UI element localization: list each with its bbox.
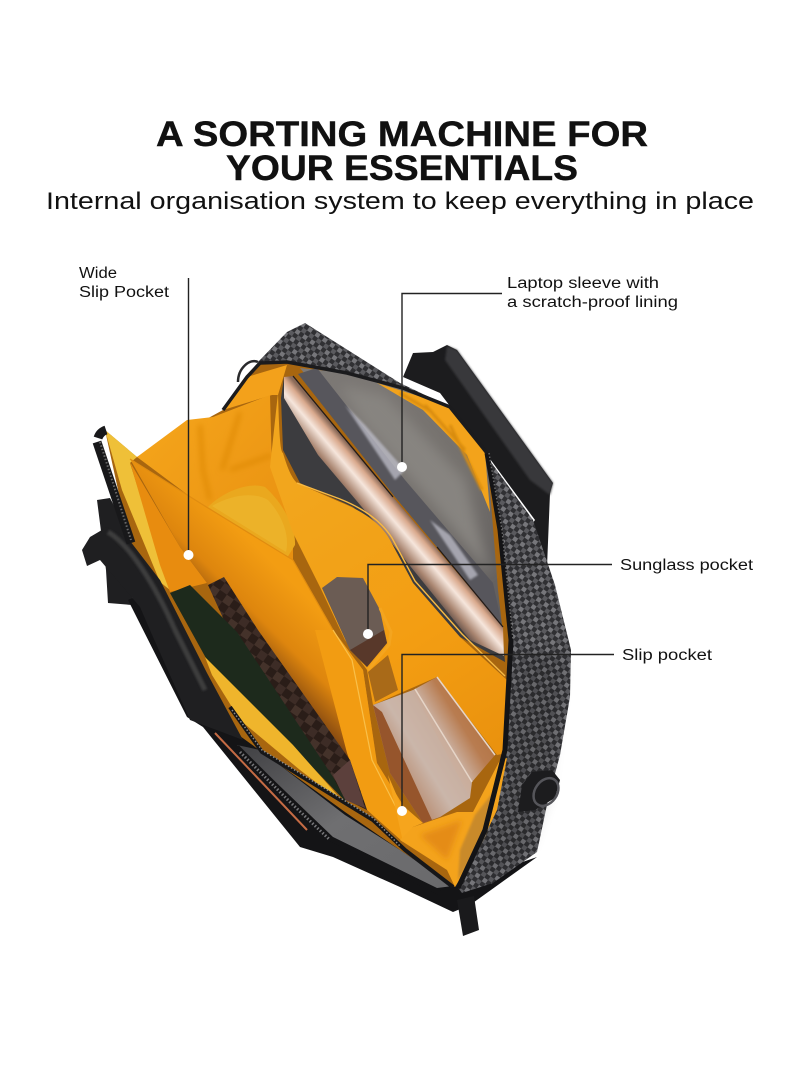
green notebook [170, 585, 347, 803]
callout: wide slip pocket: Slip Pocket [79, 284, 170, 301]
grey laptop sleeve lining [300, 368, 502, 625]
grey felt bottom band [237, 745, 453, 888]
laptop screen strip [298, 368, 502, 625]
wide pocket back panel [137, 395, 293, 562]
callout: laptop sleeve: a scratch-proof lining [507, 294, 678, 311]
callout: wide slip pocket [79, 265, 194, 560]
sunglass pocket pouch [270, 393, 507, 755]
laptop body [284, 376, 504, 656]
shell lower shade [478, 650, 565, 880]
checkered shell [258, 323, 571, 893]
title [156, 115, 648, 188]
orange top-right lining [377, 383, 490, 512]
callout: laptop sleeve [397, 275, 678, 472]
zipper pull [457, 896, 479, 936]
callout: wide slip pocket: Wide [79, 265, 117, 282]
black bottom body [128, 590, 537, 912]
back lining orange [223, 365, 287, 410]
shadow below sunglass pouch [368, 655, 398, 702]
dark sleeve interior [281, 377, 505, 662]
outer bottom zipper [237, 747, 440, 893]
left zipper [97, 430, 131, 543]
right handle [403, 345, 553, 567]
metallic box [373, 677, 495, 823]
title: YOUR ESSENTIALS [226, 149, 578, 188]
title: A SORTING MACHINE FOR [156, 115, 648, 154]
top zipper [223, 362, 487, 453]
left rear strap [97, 498, 135, 605]
callout: sunglass pocket [363, 557, 754, 639]
yellow round container [208, 486, 295, 558]
brown checked wallet [208, 577, 367, 810]
callout: slip pocket: Slip pocket [622, 647, 713, 664]
wide slip pocket front flap [130, 459, 403, 840]
callout: sunglass pocket: Sunglass pocket [620, 557, 754, 574]
subtitle: Internal organisation system to keep everything in place [46, 188, 754, 215]
sunglass case [322, 577, 387, 667]
D-ring strap hardware [518, 770, 564, 812]
bag illustration [82, 323, 571, 936]
left inner orange pocket [130, 462, 207, 592]
base interior [105, 362, 511, 887]
callout: slip pocket [397, 647, 713, 816]
orange piping [215, 733, 307, 830]
left flap yellow lining [105, 430, 170, 590]
callout: laptop sleeve: Laptop sleeve with [507, 275, 659, 292]
inner bottom zipper [230, 707, 453, 887]
left handle [82, 527, 243, 740]
small orange slip pocket interior [388, 775, 423, 842]
sunglass pouch rim [368, 608, 391, 670]
small top-left ring [238, 361, 258, 382]
yellow lower lining strip [205, 657, 347, 806]
right main zipper [458, 453, 511, 888]
bottom orange fold [400, 758, 507, 887]
